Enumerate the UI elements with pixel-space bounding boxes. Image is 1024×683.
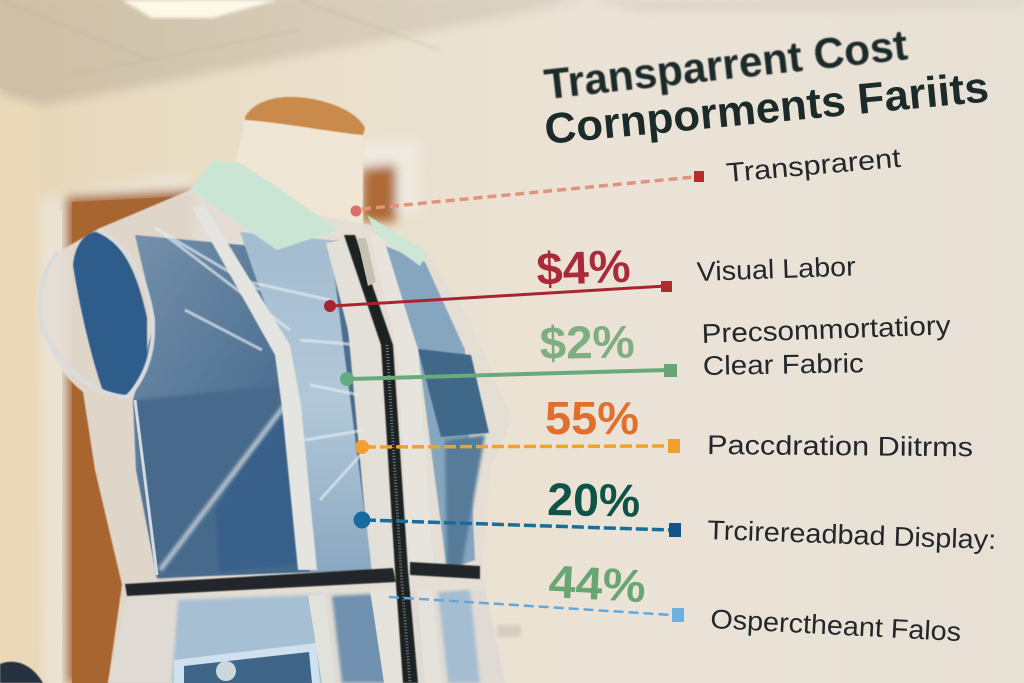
lower skirt section xyxy=(108,590,505,683)
wooden neck cap xyxy=(245,97,365,135)
zipper side bands xyxy=(326,238,395,578)
callout: transparent xyxy=(350,143,902,216)
zipper xyxy=(344,235,418,683)
title: Transparrent Cost xyxy=(542,21,910,109)
zipper pull xyxy=(357,238,376,286)
mannequin neck xyxy=(236,118,363,240)
callout: osperctheant xyxy=(389,555,962,647)
callout: transparent: Transprarent xyxy=(725,143,902,188)
callout: paccdration xyxy=(355,392,973,462)
mannequin with transparent vest xyxy=(39,97,512,683)
blue shoulder form xyxy=(73,232,147,396)
clear plastic panel xyxy=(240,232,372,572)
clear vest outer layer xyxy=(39,190,512,683)
armhole binding xyxy=(40,230,153,397)
title xyxy=(542,21,991,154)
callout: clear fabric xyxy=(340,310,952,386)
callout: paccdration: Paccdration Diitrms xyxy=(707,430,973,462)
right blue panel xyxy=(383,245,475,570)
callout: osperctheant: 44% xyxy=(547,555,647,612)
callout: paccdration: 55% xyxy=(545,392,639,444)
dark torso form xyxy=(133,235,370,578)
chest pocket xyxy=(418,349,489,437)
callout: visual labor: Visual Labor xyxy=(696,251,856,287)
callout: display: 20% xyxy=(547,473,641,527)
collar xyxy=(190,160,338,250)
callout: clear fabric: Precsommortatiory xyxy=(701,310,952,349)
title: Cornporments Fariits xyxy=(542,63,991,154)
lower pocket xyxy=(174,643,320,683)
diagonal white binding xyxy=(192,206,317,570)
callout: osperctheant: Osperctheant Falos xyxy=(710,604,962,647)
callout: display xyxy=(354,473,997,555)
callout: display: Trcirereadbad Display: xyxy=(707,515,997,555)
waist belt xyxy=(125,562,480,596)
callout: visual labor xyxy=(324,240,856,312)
callout: visual labor: $4% xyxy=(536,240,631,295)
callout: clear fabric: Clear Fabric xyxy=(703,348,864,381)
callout: clear fabric: $2% xyxy=(539,315,635,369)
